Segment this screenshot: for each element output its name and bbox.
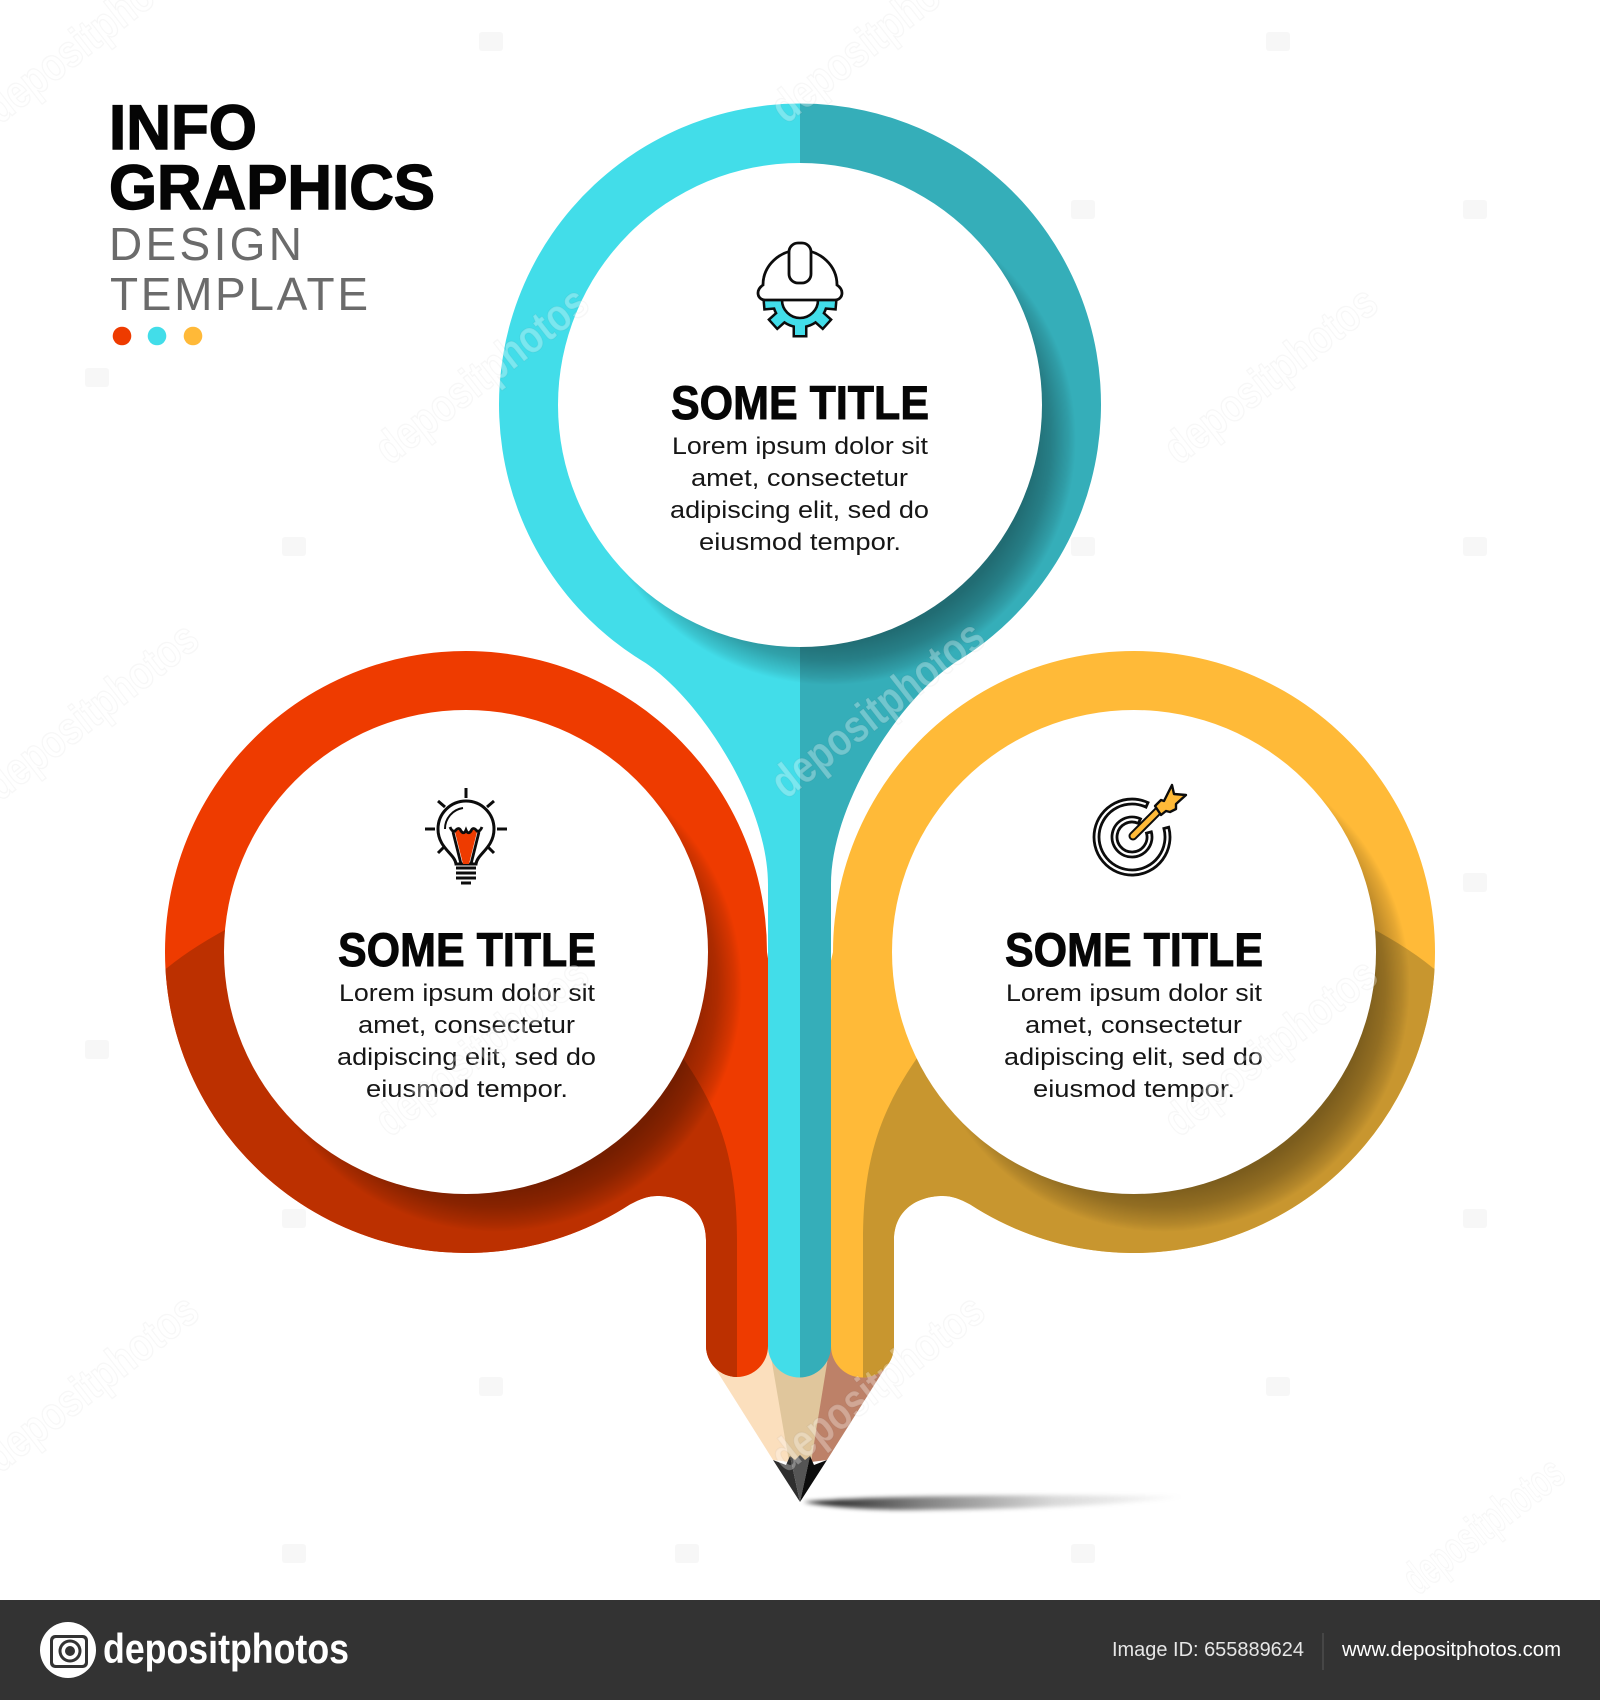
item body text bbox=[337, 980, 596, 1103]
wood: left facet bbox=[710, 1345, 789, 1462]
icon: hard hat with gear bbox=[758, 243, 842, 335]
subheading: DESIGN: DESIGN bbox=[109, 218, 302, 270]
subheading: TEMPLATE: TEMPLATE bbox=[110, 268, 368, 320]
item body text: adipiscing elit, sed do bbox=[670, 497, 929, 524]
item body text: adipiscing elit, sed do bbox=[1004, 1044, 1263, 1071]
pencil lead bbox=[773, 1455, 827, 1502]
stock watermarks: depositphotos bbox=[1153, 947, 1387, 1146]
wood: right facet bbox=[811, 1345, 890, 1462]
stock watermarks: depositphotos bbox=[760, 609, 994, 808]
item title: SOME TITLE bbox=[671, 376, 929, 429]
item body text: Lorem ipsum dolor sit bbox=[339, 980, 595, 1007]
white disc bbox=[558, 163, 1042, 647]
red shape bbox=[150, 640, 780, 1400]
blue shape bbox=[490, 95, 1110, 1385]
item body text: eiusmod tempor. bbox=[1033, 1076, 1235, 1103]
heading: INFO: INFO bbox=[109, 93, 257, 163]
panel: red pencil circle bbox=[150, 640, 780, 1400]
footer bar bbox=[0, 1600, 1600, 1700]
yellow shape bbox=[820, 640, 1450, 1400]
item body text: adipiscing elit, sed do bbox=[337, 1044, 596, 1071]
website: www.depositphotos.com bbox=[1341, 1639, 1561, 1661]
stock watermarks: depositphotos bbox=[364, 947, 598, 1146]
camera watermark marks bbox=[85, 32, 1487, 1563]
item body text: eiusmod tempor. bbox=[699, 529, 901, 556]
item body text bbox=[670, 433, 929, 556]
stock watermarks: depositphotos bbox=[1153, 275, 1387, 474]
white disc bbox=[892, 710, 1376, 1194]
logo wordmark: depositphotos bbox=[103, 1625, 349, 1672]
item body text: amet, consectetur bbox=[691, 465, 908, 492]
title block bbox=[109, 93, 435, 345]
item title: SOME TITLE bbox=[1005, 923, 1263, 976]
panel: blue pencil circle bbox=[490, 95, 1110, 1385]
wood: middle facet bbox=[769, 1345, 831, 1462]
item body text: Lorem ipsum dolor sit bbox=[672, 433, 928, 460]
stock watermarks: depositphotos bbox=[760, 1283, 994, 1482]
heading: GRAPHICS: GRAPHICS bbox=[109, 153, 435, 223]
image id: Image ID: 655889624 bbox=[1112, 1639, 1304, 1661]
item title: SOME TITLE bbox=[338, 923, 596, 976]
item body text bbox=[1004, 980, 1263, 1103]
item body text: Lorem ipsum dolor sit bbox=[1006, 980, 1262, 1007]
item body text: eiusmod tempor. bbox=[366, 1076, 568, 1103]
icon: light bulb bbox=[425, 788, 507, 883]
icon: camera logo bbox=[40, 1622, 96, 1678]
icon: target with arrow bbox=[1094, 785, 1186, 875]
pencil shadow on the ground bbox=[803, 1495, 1190, 1510]
pencil wood tip and lead bbox=[710, 1345, 890, 1502]
white disc bbox=[224, 710, 708, 1194]
three colour dots bbox=[113, 327, 202, 345]
item body text: amet, consectetur bbox=[1025, 1012, 1242, 1039]
panel: yellow pencil circle bbox=[820, 640, 1450, 1400]
stock watermarks: depositphotos bbox=[364, 275, 598, 474]
item body text: amet, consectetur bbox=[358, 1012, 575, 1039]
